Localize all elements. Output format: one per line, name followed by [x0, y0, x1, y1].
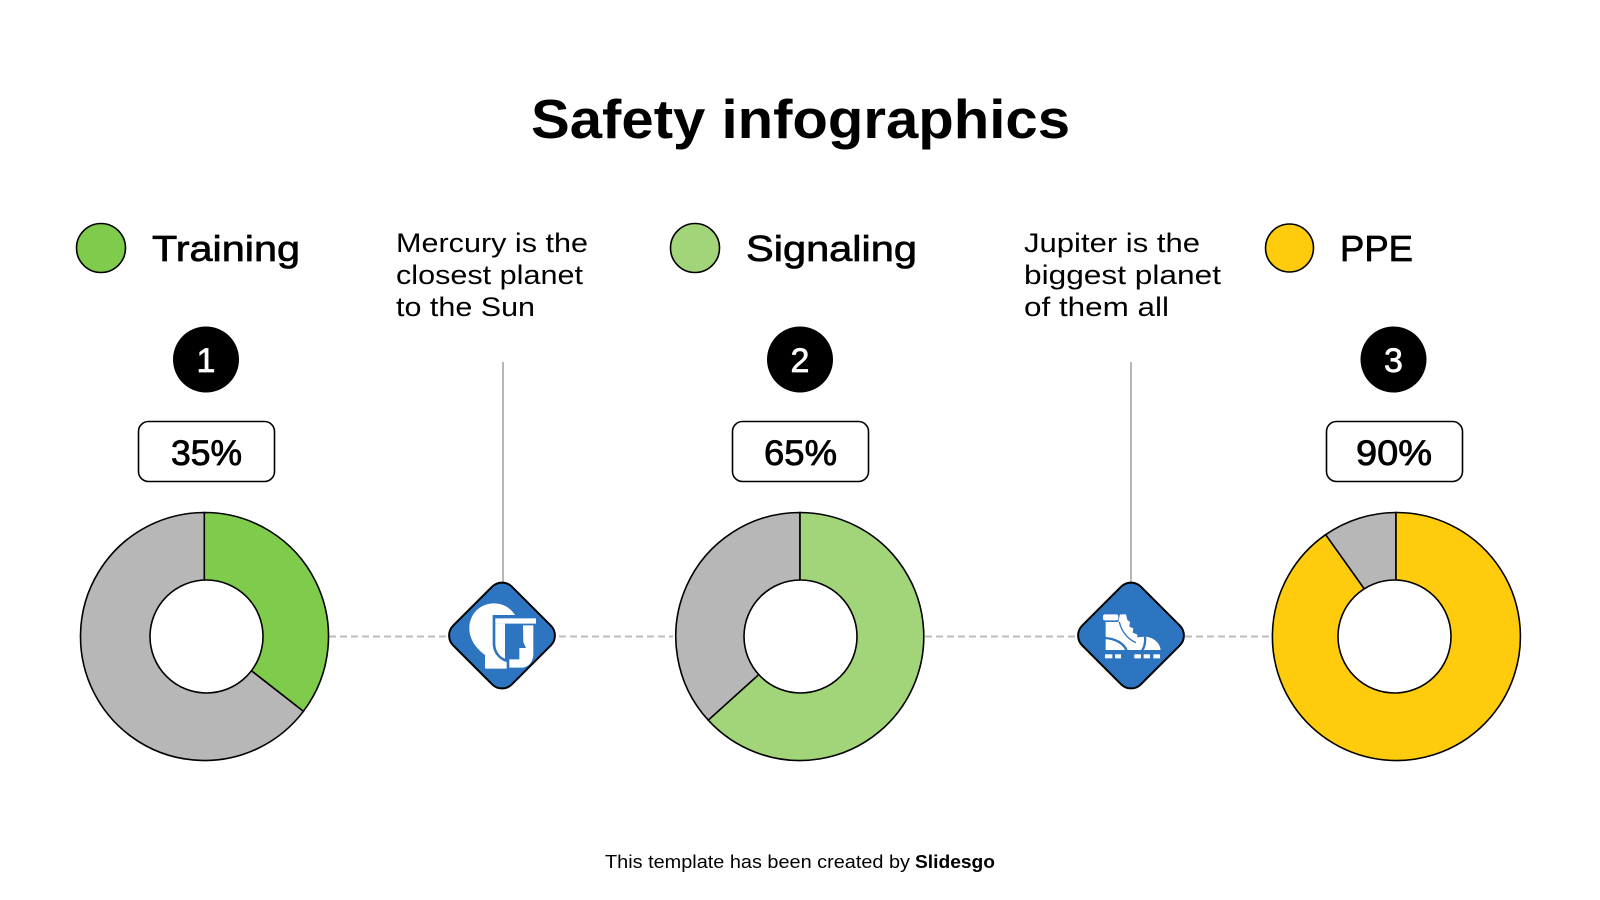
connector: vertical line to Jupiter text [1130, 362, 1132, 584]
label: signaling: Signaling [746, 228, 917, 269]
value box: 65%: 65% [764, 434, 837, 473]
number badge 1 [173, 326, 239, 392]
number badge 3: 3 [1384, 342, 1403, 380]
value box: 35% [138, 422, 274, 482]
label: PPE: PPE [1340, 228, 1413, 269]
connector: vertical line to Mercury text [502, 362, 504, 584]
footer credit: Slidesgo [915, 852, 995, 872]
legend dot: training [76, 224, 126, 272]
number badge 2 [767, 326, 833, 392]
donut chart: 65% [676, 512, 924, 760]
text block: Mercury: to the Sun [396, 292, 535, 322]
connector: horizontal dashed line [329, 636, 1270, 638]
text block: Mercury [396, 228, 588, 322]
value box: 35%: 35% [171, 434, 242, 473]
number badge 1: 1 [197, 342, 215, 380]
icon: head protection diamond [443, 577, 561, 694]
panel: PPE [1266, 224, 1520, 760]
value box: 90%: 90% [1356, 434, 1432, 473]
value box: 65% [732, 422, 868, 482]
text block: Mercury: closest planet [396, 260, 584, 290]
number badge 3 [1360, 326, 1426, 392]
donut chart: 35% [81, 512, 329, 760]
panel: training [76, 224, 329, 760]
panel: signaling [670, 224, 924, 760]
text block: Mercury: Mercury is the [396, 228, 588, 258]
icon: safety boot diamond [1072, 577, 1190, 694]
footer credit: This template has been created by [605, 852, 910, 872]
text block: Jupiter: Jupiter is the [1024, 228, 1200, 258]
title: Safety infographics [531, 88, 1070, 150]
legend dot: PPE [1266, 224, 1314, 272]
donut chart: 90% [1272, 512, 1520, 760]
text block: Jupiter: biggest planet [1024, 260, 1222, 290]
text block: Jupiter: of them all [1024, 292, 1169, 322]
label: training: Training [152, 228, 300, 269]
legend dot: signaling [670, 224, 720, 272]
text block: Jupiter [1024, 228, 1222, 322]
number badge 2: 2 [791, 342, 809, 380]
value box: 90% [1326, 422, 1462, 482]
